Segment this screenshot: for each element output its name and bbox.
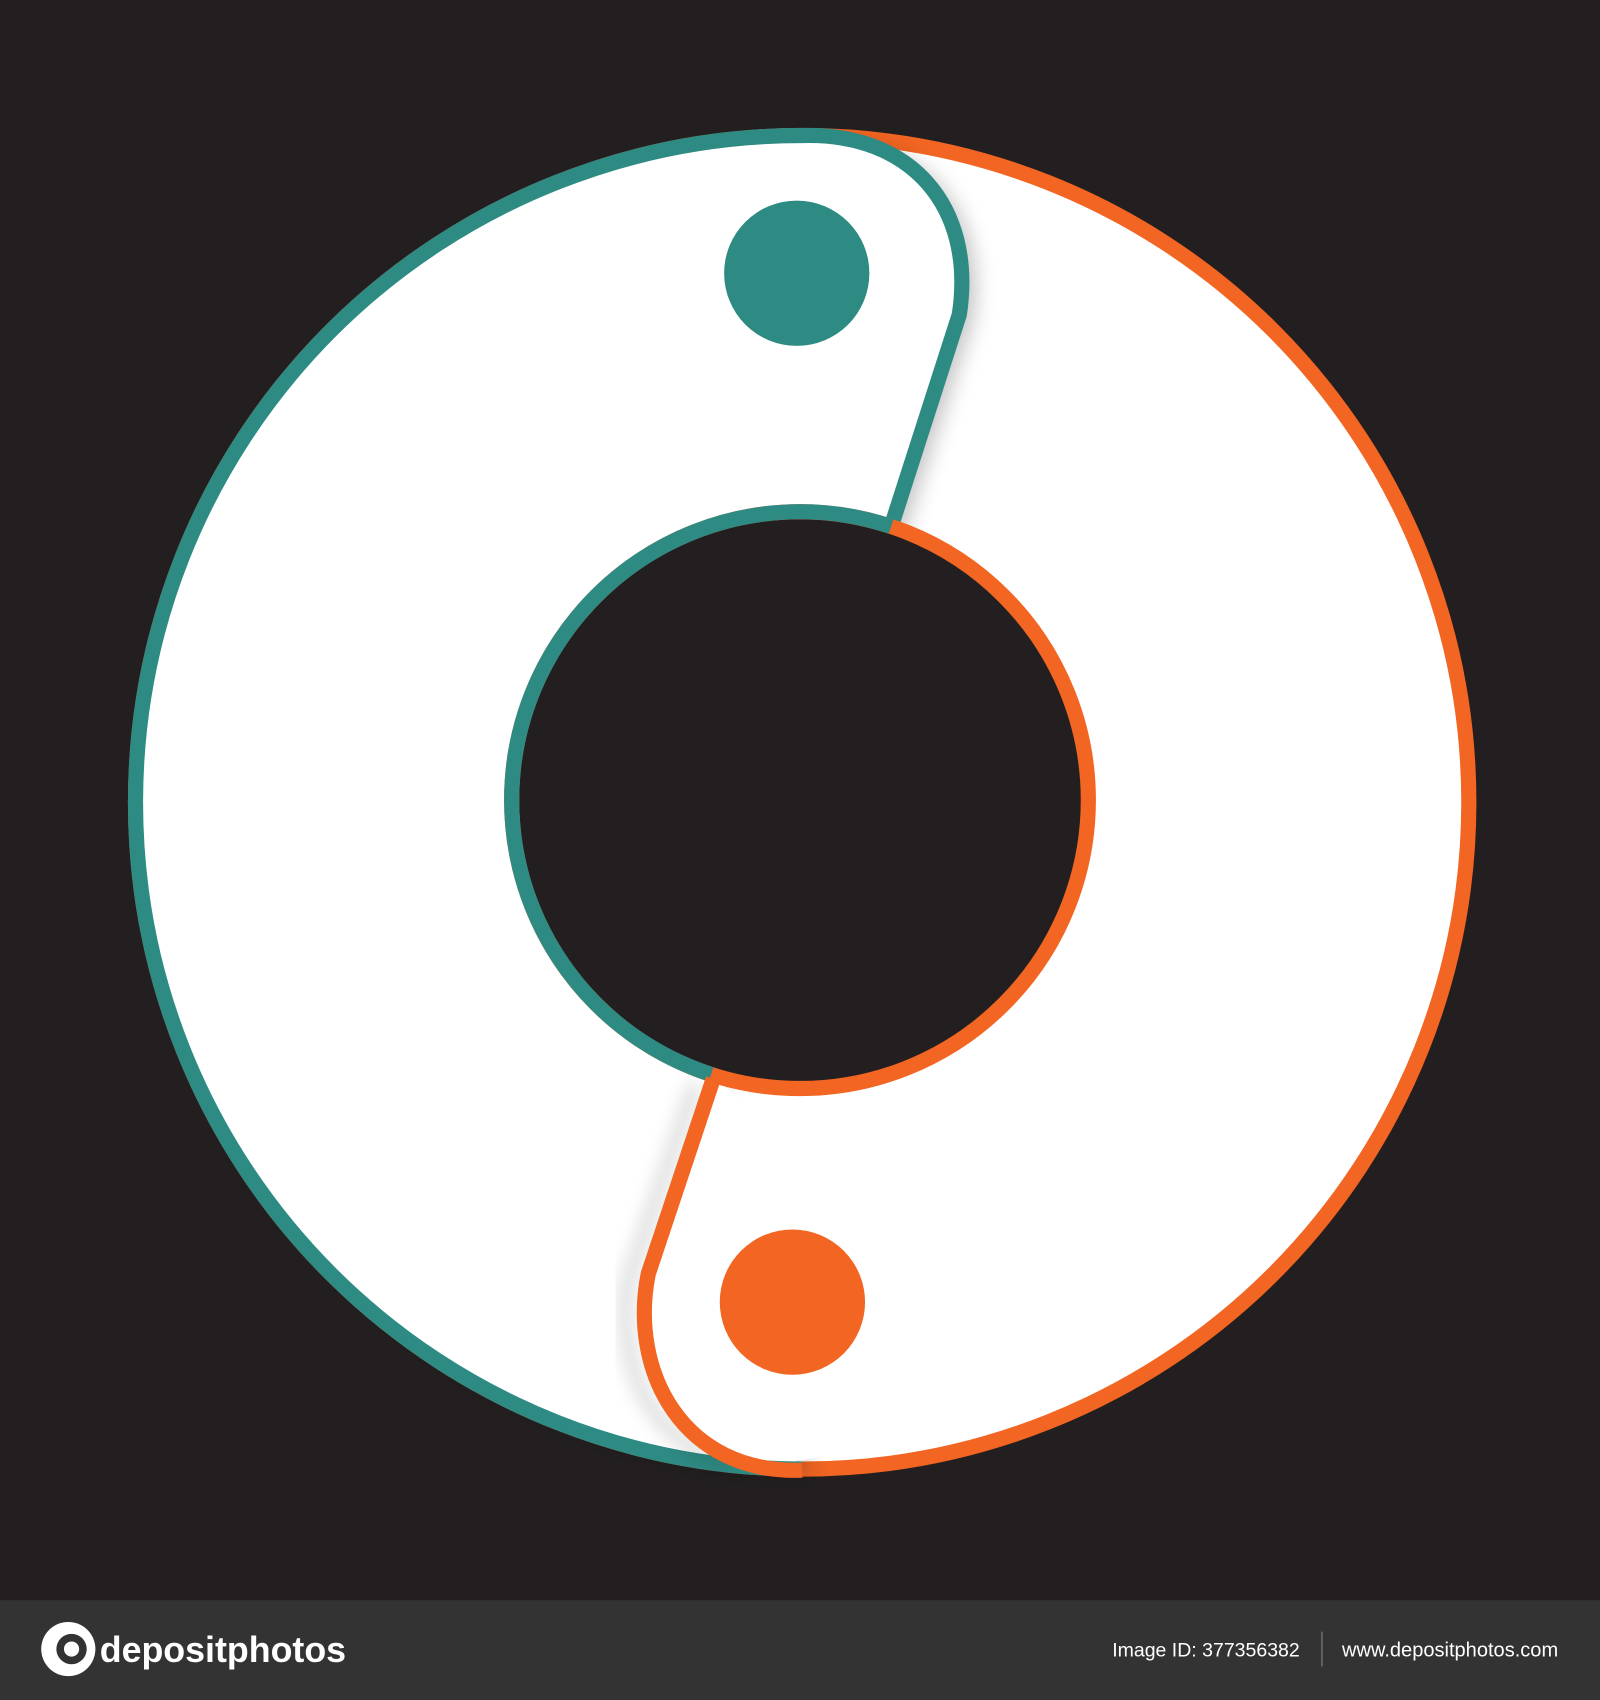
teal dot: [724, 201, 869, 346]
orange tab shadow: [626, 1084, 728, 1464]
logo icon: [41, 1622, 95, 1676]
ring diagram: [136, 135, 1469, 1470]
website: www.depositphotos.com: [1341, 1640, 1558, 1662]
inner dark circle: [512, 512, 1088, 1089]
orange dot: [720, 1229, 865, 1375]
teal segment with top tab: [136, 135, 962, 1469]
orange bottom tab fill: [644, 1078, 932, 1460]
logo text: depositphotos: [100, 1630, 346, 1670]
image id: Image ID: 377356382: [1112, 1640, 1300, 1662]
outer ring (orange segment): [136, 136, 1469, 1469]
footer bar: [0, 1600, 1600, 1700]
orange tab outline: [644, 1079, 802, 1470]
